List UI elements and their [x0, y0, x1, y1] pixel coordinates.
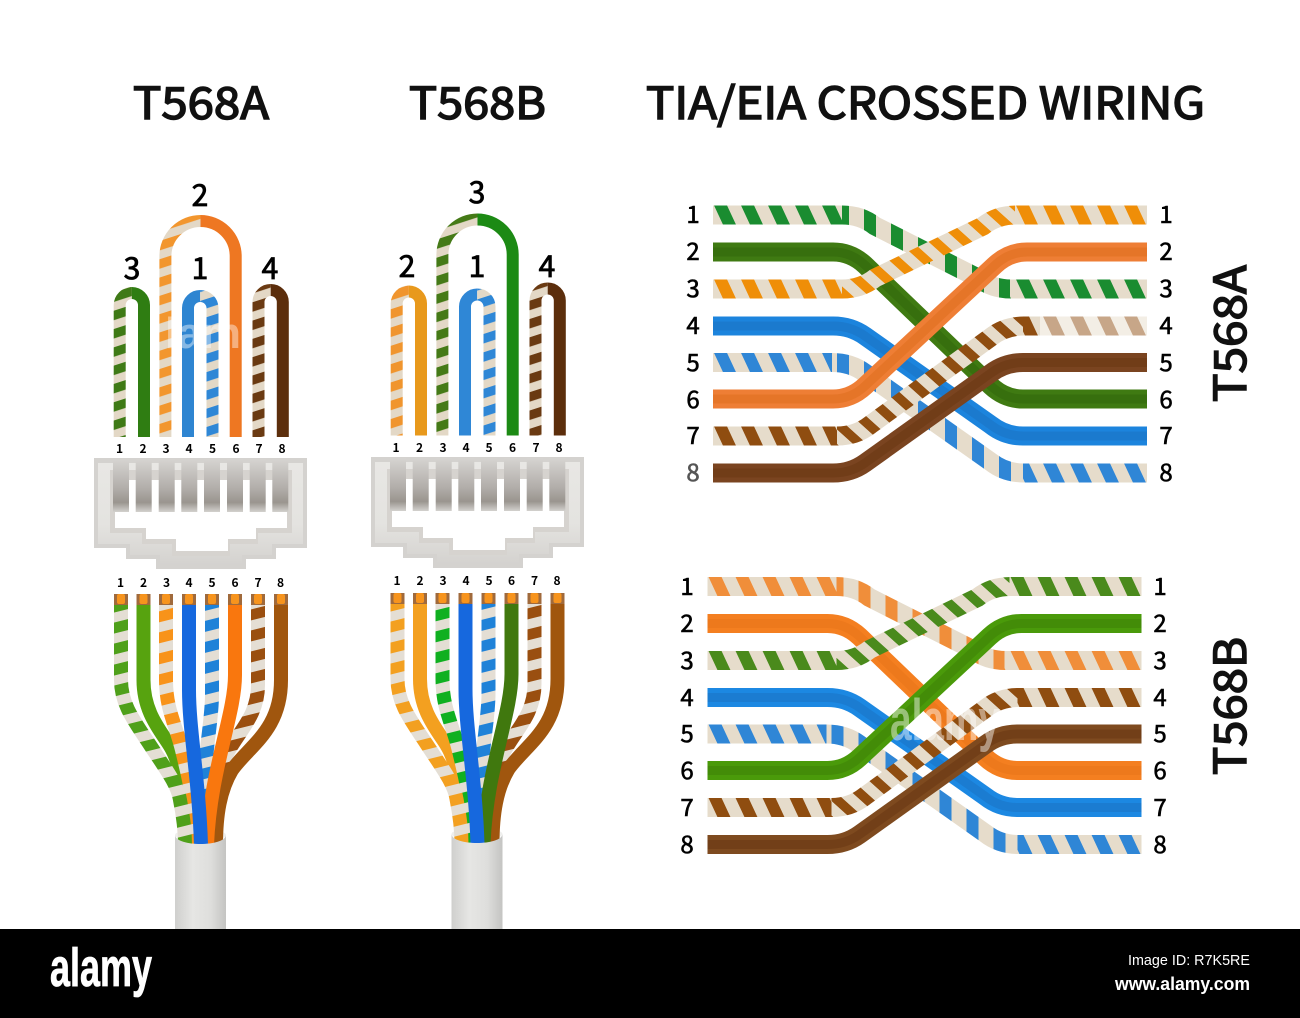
right pin numbers: T568B wiring: 6: [1153, 751, 1167, 786]
left pin numbers: T568B wiring: 5: [680, 714, 694, 749]
pin numbers below connector: T568A: 4: [185, 574, 193, 591]
pin numbers above connector: T568B: 2: [416, 439, 423, 456]
left pin numbers: T568B wiring: 1: [680, 567, 694, 602]
pair numbers: T568B: 2: [399, 242, 415, 286]
pair numbers: T568A: [124, 171, 278, 288]
left pin numbers: T568B wiring: [680, 567, 694, 860]
title: T568B: T568B: [409, 68, 546, 132]
pair numbers: T568B: [399, 168, 555, 286]
crossed wires: T568B: [708, 586, 1142, 844]
pin numbers above connector: T568B: 3: [439, 439, 447, 456]
left pin numbers: T568A wiring: 3: [686, 269, 700, 304]
left pin numbers: T568B wiring: 4: [680, 678, 694, 713]
pin numbers above connector: T568A: 3: [162, 440, 170, 457]
title: T568A: T568A: [133, 68, 269, 132]
pin numbers above connector: T568B: [392, 439, 563, 456]
right pin numbers: T568B wiring: 5: [1153, 714, 1167, 749]
pin numbers above connector: T568A: 4: [185, 440, 193, 457]
pair numbers: T568B: 3: [469, 168, 485, 212]
left pin numbers: T568A wiring: 6: [686, 380, 700, 415]
fanned wires: T568A: [114, 594, 288, 845]
panel: T568A connector: [94, 171, 307, 932]
pin numbers below connector: T568B: 6: [508, 572, 515, 589]
pair numbers: T568A: 1: [192, 244, 208, 288]
fanned wires: T568B: [390, 593, 564, 844]
pin numbers below connector: T568B: 4: [462, 572, 470, 589]
title: TIA/EIA crossed wiring: TIA/EIA CROSSED WIRING: [646, 68, 1205, 132]
pin numbers above connector: T568A: 8: [278, 440, 286, 457]
left pin numbers: T568A wiring: 1: [686, 195, 700, 230]
panel: T568B connector: [371, 168, 584, 931]
right pin numbers: T568B wiring: [1153, 567, 1167, 860]
right pin numbers: T568B wiring: 2: [1153, 604, 1167, 639]
left pin numbers: T568A wiring: [686, 195, 700, 488]
pin numbers below connector: T568B: [393, 572, 561, 589]
right pin numbers: T568A wiring: 6: [1159, 380, 1173, 415]
side label: T568B: T568B: [1195, 637, 1259, 775]
pin numbers above connector: T568B: 4: [462, 439, 470, 456]
pair numbers: T568A: 3: [124, 244, 140, 288]
left pin numbers: T568B wiring: 6: [680, 751, 694, 786]
pair loops: T568B top wires: [397, 220, 560, 436]
pin numbers below connector: T568A: 7: [254, 574, 262, 591]
right pin numbers: T568A wiring: 2: [1159, 232, 1173, 267]
right pin numbers: T568A wiring: 1: [1159, 195, 1173, 230]
pin numbers above connector: T568A: 6: [232, 440, 240, 457]
RJ45 plug: T568A: [94, 458, 307, 569]
left pin numbers: T568B wiring: 3: [680, 641, 694, 676]
pin numbers above connector: T568A: 1: [116, 440, 123, 457]
pin numbers above connector: T568A: 2: [139, 440, 147, 457]
pair loops: T568A top wires: [120, 221, 283, 437]
pin numbers below connector: T568A: 5: [208, 574, 216, 591]
footer bar: [0, 929, 1300, 1018]
pin numbers below connector: T568B: 1: [393, 572, 401, 589]
watermark fade on T568A wire 4: [1040, 316, 1148, 336]
right pin numbers: T568B wiring: 7: [1153, 788, 1167, 823]
pin numbers above connector: T568B: 8: [555, 439, 563, 456]
footer url: www.alamy.com: [1114, 974, 1250, 994]
pin numbers below connector: T568A: 8: [277, 574, 284, 591]
panel: crossed wiring T568A: [686, 195, 1259, 488]
left pin numbers: T568A wiring: 4: [686, 306, 700, 341]
pin numbers below connector: T568B: 7: [531, 572, 538, 589]
side label: T568A: T568A: [1195, 265, 1259, 402]
pin numbers below connector: T568A: 3: [163, 574, 170, 591]
right pin numbers: T568A wiring: 3: [1159, 269, 1173, 304]
pair numbers: T568A: 2: [192, 171, 208, 215]
pin numbers above connector: T568B: 5: [485, 439, 493, 456]
pair numbers: T568A: 4: [262, 244, 278, 288]
pair numbers: T568B: 4: [539, 242, 555, 286]
right pin numbers: T568A wiring: 5: [1159, 343, 1173, 378]
watermark over T568B crossing: alamy: [890, 688, 1000, 753]
left pin numbers: T568A wiring: 2: [686, 232, 700, 267]
pin numbers below connector: T568A: 2: [140, 574, 147, 591]
crossed wires: T568A: [713, 215, 1147, 473]
pin numbers below connector: T568B: 3: [439, 572, 447, 589]
pin numbers above connector: T568B: 6: [509, 439, 516, 456]
RJ45 plug: T568B: [371, 457, 584, 568]
cable end: T568A: [114, 594, 288, 932]
left pin numbers: T568A wiring: 5: [686, 343, 700, 378]
pin numbers above connector: T568A: [116, 440, 286, 457]
right pin numbers: T568A wiring: [1159, 195, 1173, 488]
pair numbers: T568B: 1: [469, 242, 485, 286]
footer image id: Image ID: R7K5RE: [1128, 952, 1250, 969]
right pin numbers: T568A wiring: 8: [1159, 453, 1173, 488]
footer logo: alamy: [50, 938, 152, 998]
pin numbers below connector: T568A: 1: [117, 574, 124, 591]
pin numbers above connector: T568B: 1: [392, 439, 400, 456]
right pin numbers: T568B wiring: 3: [1153, 641, 1167, 676]
pin numbers below connector: T568B: 2: [416, 572, 424, 589]
right pin numbers: T568A wiring: 7: [1159, 416, 1173, 451]
pin numbers below connector: T568A: 6: [231, 574, 239, 591]
right pin numbers: T568B wiring: 4: [1153, 678, 1167, 713]
left pin numbers: T568B wiring: 2: [680, 604, 694, 639]
left pin numbers: T568B wiring: 8: [680, 825, 694, 860]
right pin numbers: T568A wiring: 4: [1159, 306, 1173, 341]
panel: crossed wiring T568B: [680, 567, 1259, 860]
pin numbers below connector: T568B: 5: [485, 572, 493, 589]
pin numbers above connector: T568B: 7: [532, 439, 540, 456]
pin numbers above connector: T568A: 5: [209, 440, 216, 457]
pin numbers below connector: T568B: 8: [553, 572, 561, 589]
right pin numbers: T568B wiring: 1: [1153, 567, 1167, 602]
right pin numbers: T568B wiring: 8: [1153, 825, 1167, 860]
cable end: T568B: [390, 593, 564, 931]
pin numbers above connector: T568A: 7: [255, 440, 263, 457]
left pin numbers: T568B wiring: 7: [680, 788, 694, 823]
watermark on T568A loops: lam: [165, 309, 241, 358]
pin numbers below connector: T568A: [117, 574, 284, 591]
left pin numbers: T568A wiring: 7: [686, 416, 700, 451]
left pin numbers: T568A wiring: 8: [686, 453, 700, 488]
